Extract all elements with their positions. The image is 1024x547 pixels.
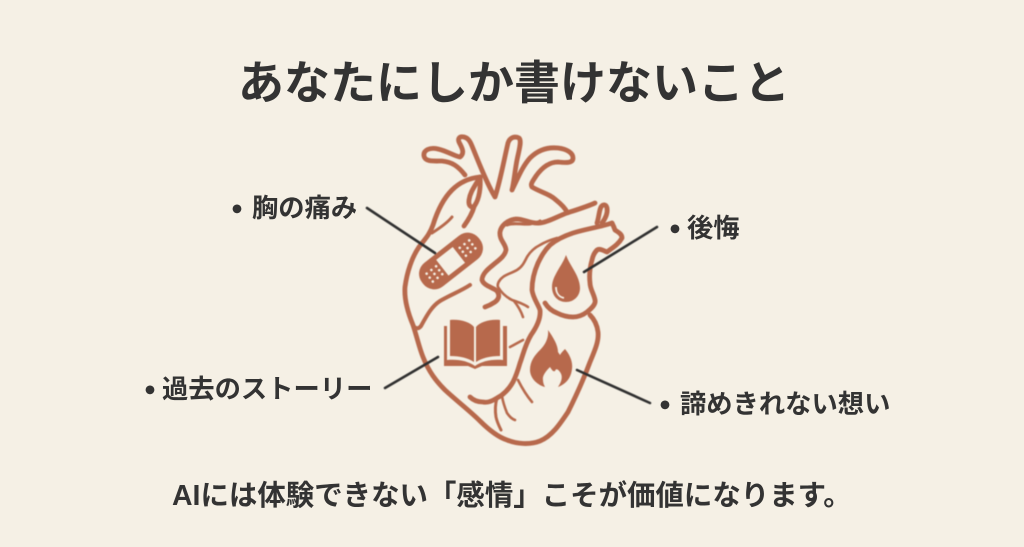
label: regret bbox=[658, 212, 740, 250]
label: chest pain: ・ bbox=[220, 192, 254, 230]
label: past story: ・ bbox=[133, 373, 167, 411]
label: regret: 後悔 bbox=[687, 213, 740, 243]
icon: band-aid bbox=[413, 227, 489, 295]
leader: past story bbox=[385, 357, 438, 388]
leader: regret bbox=[584, 227, 657, 272]
label: chest pain bbox=[220, 192, 357, 230]
icon: water drop bbox=[552, 255, 580, 302]
label: lingering feelings: ・ bbox=[648, 388, 682, 426]
title: あなたにしか書けないこと bbox=[238, 57, 790, 109]
label: regret: ・ bbox=[658, 212, 692, 250]
label: lingering feelings bbox=[648, 388, 890, 426]
leader: chest pain bbox=[367, 208, 435, 253]
icon: open book bbox=[444, 320, 507, 369]
icon: flame bbox=[530, 330, 572, 387]
label: past story: 過去のストーリー bbox=[162, 374, 372, 404]
caption: AIには体験できない「感情」こそが価値になります。 bbox=[172, 480, 852, 512]
label: chest pain: 胸の痛み bbox=[252, 193, 357, 223]
heart outline bbox=[405, 137, 622, 444]
leader: lingering feelings bbox=[577, 370, 650, 403]
label: lingering feelings: 諦めきれない想い bbox=[680, 389, 890, 419]
label: past story bbox=[133, 373, 372, 411]
thin vessels bbox=[495, 238, 557, 430]
